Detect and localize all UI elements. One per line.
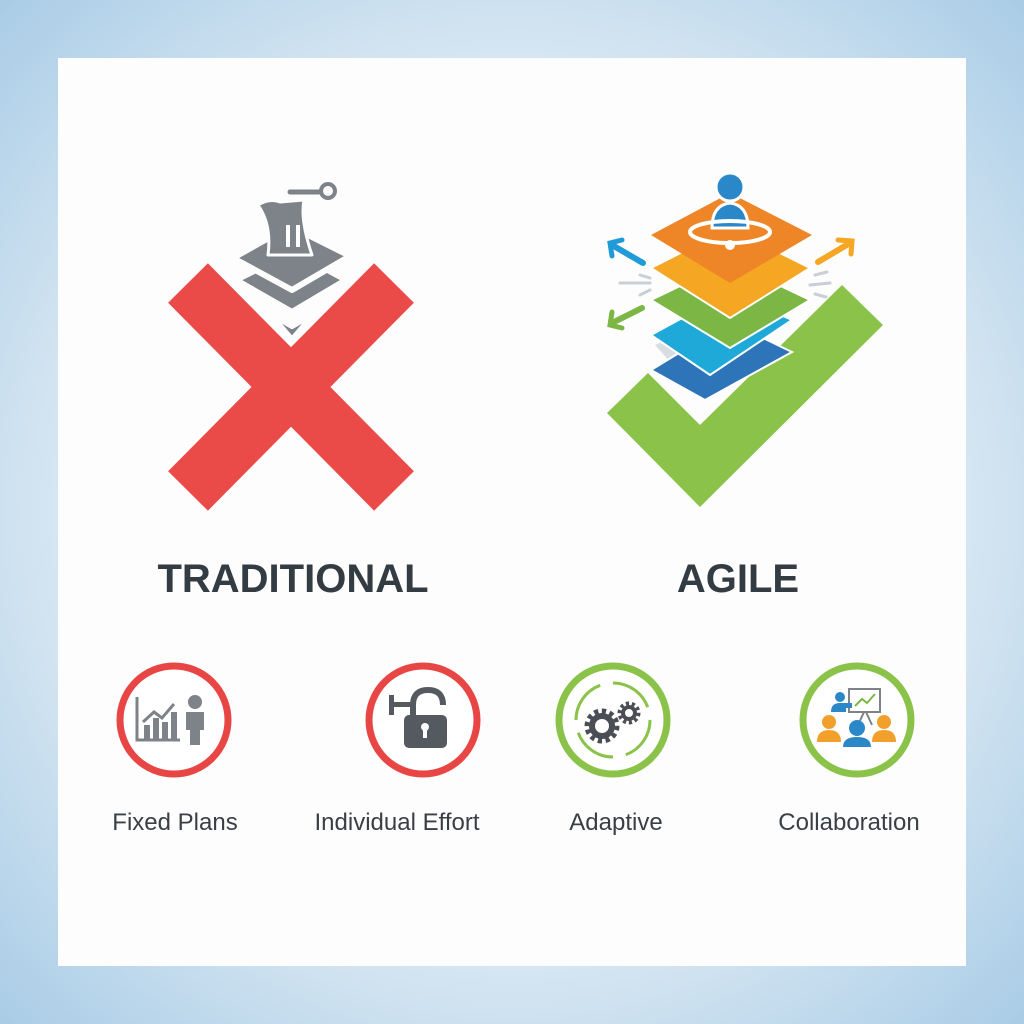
icon: traditional document stack xyxy=(233,184,350,340)
label: Adaptive: Adaptive xyxy=(569,809,663,836)
heading: AGILE: AGILE xyxy=(677,557,799,601)
icon: fixed plans xyxy=(120,666,228,774)
label: Collaboration: Collaboration xyxy=(778,809,920,836)
icon: green check xyxy=(607,285,883,507)
icon: individual effort lock xyxy=(369,666,477,774)
heading: TRADITIONAL: TRADITIONAL xyxy=(157,557,429,601)
label: Individual Effort: Individual Effort xyxy=(314,809,480,836)
white panel xyxy=(58,58,966,966)
icon: collaboration team xyxy=(803,666,911,774)
label: Fixed Plans: Fixed Plans xyxy=(112,809,238,836)
icon: agile layers xyxy=(610,173,852,400)
icon: adaptive gears xyxy=(559,666,667,774)
icon: red X xyxy=(188,283,394,491)
